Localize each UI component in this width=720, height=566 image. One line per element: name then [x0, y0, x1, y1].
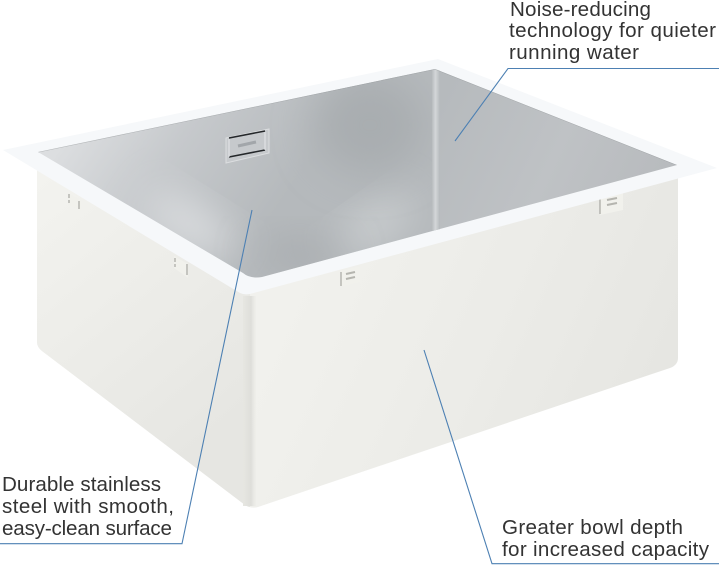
- bowl rim shadow: [38, 69, 677, 165]
- callout: greater bowl depth: [502, 516, 710, 561]
- leader line: bowl depth: [424, 350, 719, 564]
- stainless steel bowl: [30, 60, 680, 285]
- sink outer body: [37, 170, 678, 508]
- callout: noise-reducing technology: running water: [509, 41, 639, 64]
- sink flange rim: [3, 59, 717, 294]
- leader line: stainless steel: [0, 210, 252, 544]
- callout: greater bowl depth: for increased capacity: [502, 538, 710, 561]
- drain overflow badge: [226, 129, 269, 163]
- callout: durable stainless steel: Durable stainless: [2, 473, 161, 496]
- mounting clips: [68, 192, 623, 287]
- callout: durable stainless steel: steel with smooth,: [2, 495, 174, 518]
- bowl shading: [151, 80, 412, 270]
- sink illustration: [3, 59, 717, 508]
- bowl corner post: [432, 66, 440, 232]
- bowl right wall: [437, 69, 680, 232]
- callout: durable stainless steel: [2, 473, 174, 540]
- bowl back-left wall: [30, 60, 440, 285]
- callout: noise-reducing technology: technology for quieter: [509, 19, 716, 42]
- callout: durable stainless steel: easy-clean surface: [2, 517, 172, 540]
- callout: greater bowl depth: Greater bowl depth: [502, 516, 683, 539]
- leader line: noise-reducing: [455, 68, 719, 141]
- callout: noise-reducing technology: [509, 0, 716, 64]
